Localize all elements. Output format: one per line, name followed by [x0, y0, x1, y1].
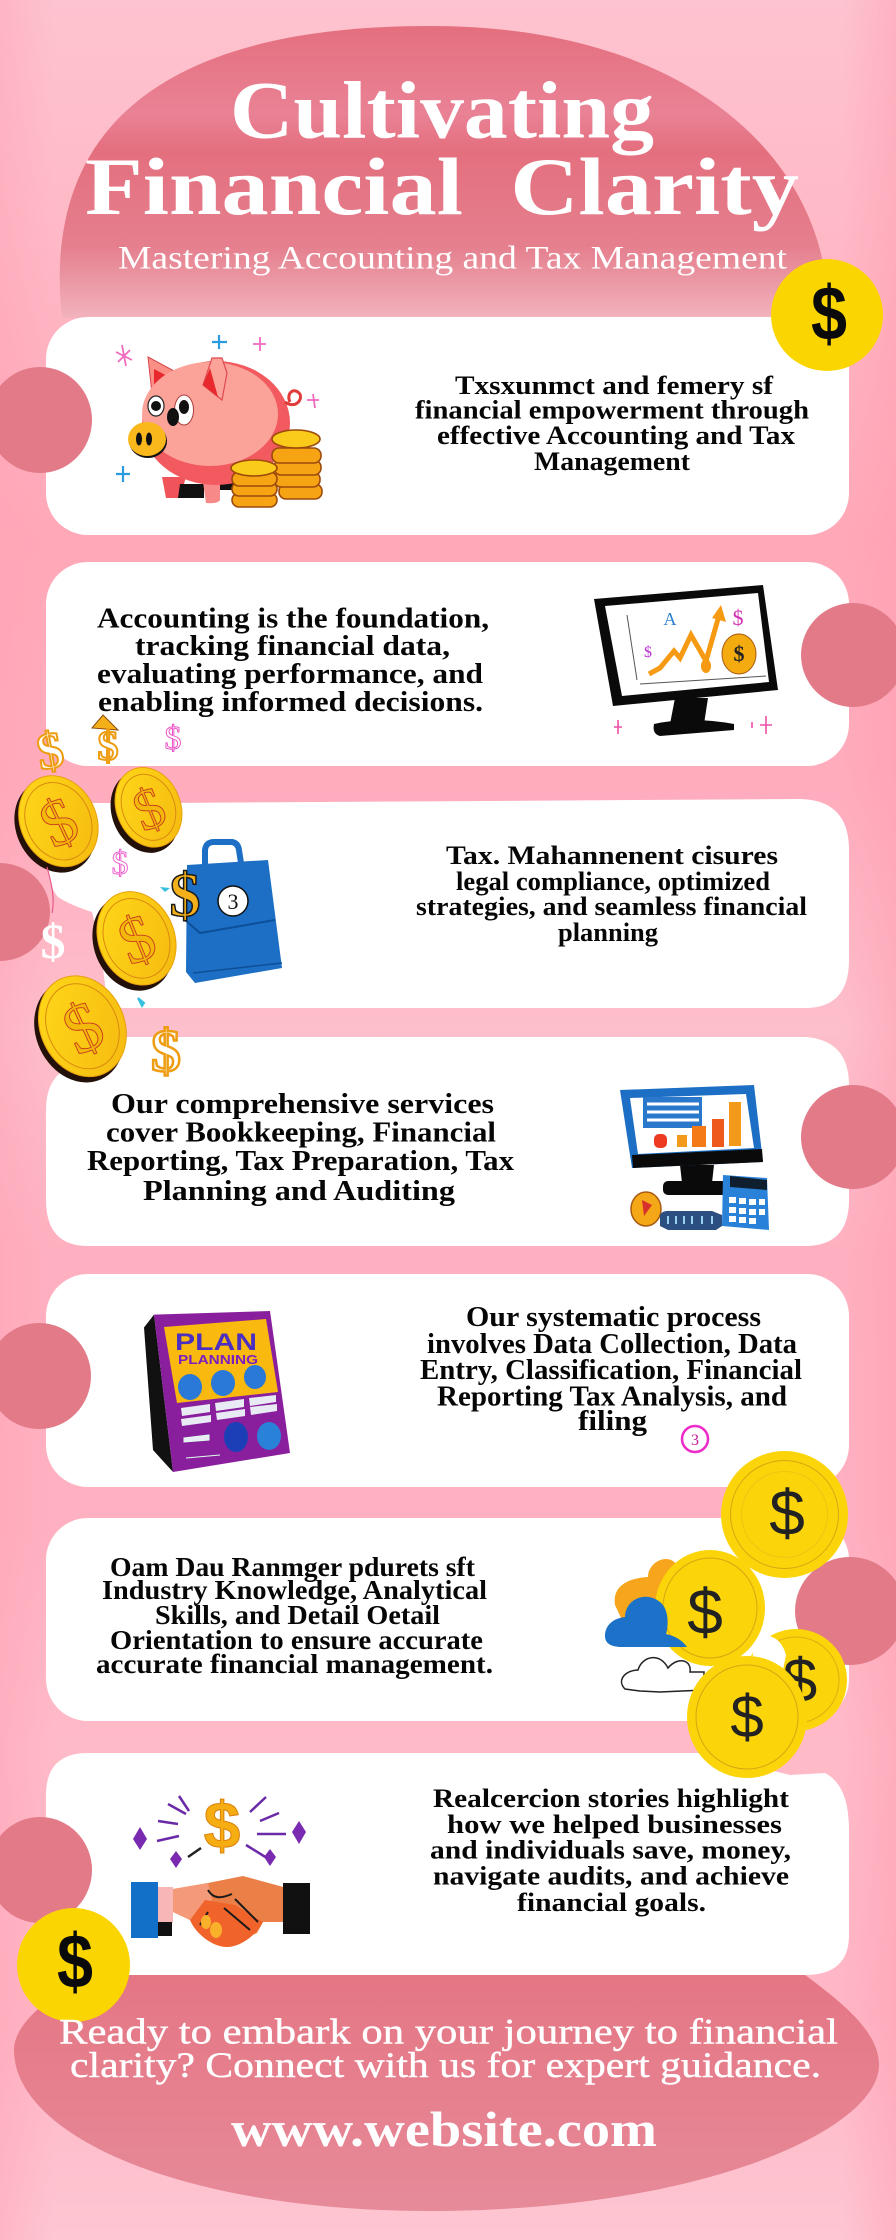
accounting text: enabling informed decisions.: [98, 686, 483, 718]
decorative circle left 3: [0, 863, 50, 961]
icon: monitor with chart: [594, 585, 778, 736]
panel: services: [46, 1037, 849, 1246]
coin: $: [123, 773, 175, 844]
services text: Our comprehensive services: [111, 1088, 494, 1120]
dollar glyphs and confetti: $: [164, 720, 182, 757]
footer blob: [14, 1975, 879, 2211]
title: [85, 64, 799, 232]
intro text: effective Accounting and Tax: [437, 421, 795, 450]
call to action text: [59, 2012, 838, 2085]
icon: monitor with chart: A: [664, 609, 676, 629]
icon: planning board: PLAN: [175, 1329, 257, 1356]
intro text: [415, 371, 810, 476]
icon: handshake with dollar: $: [204, 1788, 240, 1862]
icon: monitor with chart: $: [732, 605, 744, 630]
coin badge top right: $: [811, 271, 847, 357]
process text: Entry, Classification, Financial: [420, 1355, 802, 1386]
coin back right: $: [783, 1647, 817, 1716]
website url: www.website.com: [231, 2101, 657, 2157]
coin: [17, 961, 144, 1097]
process text: Reporting Tax Analysis, and: [437, 1382, 787, 1412]
stories text: and individuals save, money,: [430, 1834, 791, 1864]
dollar glyphs and confetti: $: [112, 845, 128, 882]
tax management text: planning: [558, 918, 658, 947]
decorative circle left 5: [0, 1323, 91, 1429]
dollar glyphs and confetti: [33, 720, 200, 1084]
expertise text: Skills, and Detail Oetail: [155, 1600, 441, 1630]
expertise text: Industry Knowledge, Analytical: [102, 1575, 488, 1605]
coin: $: [51, 986, 116, 1071]
intro text: Management: [534, 447, 690, 476]
coin front: $: [730, 1683, 764, 1750]
icon: blue briefcase: 3: [228, 889, 238, 914]
tax management text: strategies, and seamless financial: [416, 892, 807, 921]
coin top: [721, 1451, 848, 1578]
icon: planning board: [144, 1311, 290, 1472]
icon: handshake with dollar: [131, 1788, 310, 1947]
icon: clouds and gold coins: [605, 1451, 848, 1778]
accounting text: tracking financial data,: [135, 630, 450, 662]
stories text: Realcercion stories highlight: [433, 1783, 789, 1813]
process text: involves Data Collection, Data: [427, 1329, 797, 1360]
coin badge top right: [771, 259, 883, 371]
panel: introduction: [46, 317, 849, 535]
icon: monitor with chart: $: [734, 641, 744, 666]
icon: piggy bank: [116, 335, 322, 507]
coin top: $: [769, 1477, 805, 1549]
expertise text: Oam Dau Ranmger pdurets sft: [110, 1552, 475, 1582]
outline cloud: [622, 1658, 704, 1692]
call to action text: Ready to embark on your journey to financial: [59, 2012, 838, 2052]
accounting text: [97, 602, 489, 718]
intro text: Txsxunmct and femery sf: [455, 371, 773, 400]
decorative circle right 2: [801, 603, 896, 707]
stories text: financial goals.: [517, 1887, 706, 1917]
call to action text: clarity? Connect with us for expert guidance.: [70, 2045, 821, 2085]
decorative circle left 1: [0, 367, 92, 473]
services text: Planning and Auditing: [143, 1175, 456, 1207]
dollar glyphs and confetti: $: [170, 862, 200, 930]
coin middle: [655, 1550, 765, 1666]
coin: $: [108, 900, 166, 980]
icon: planning board: PLANNING: [178, 1352, 258, 1367]
icon: pink coin outline: [682, 1426, 708, 1452]
coin: [98, 757, 195, 863]
header blob: [60, 26, 828, 318]
title: Financial Clarity: [85, 141, 799, 232]
services text: Reporting, Tax Preparation, Tax: [87, 1145, 515, 1177]
decorative circle right 4: [801, 1085, 896, 1189]
decorative circle right 6: [795, 1557, 896, 1665]
coin: $: [29, 783, 89, 863]
accounting text: Accounting is the foundation,: [97, 602, 489, 634]
coin middle: $: [687, 1576, 723, 1648]
panel: success stories: [46, 1753, 849, 1975]
intro text: financial empowerment through: [415, 396, 810, 424]
panel: tax management: [46, 799, 849, 1008]
stories text: how we helped businesses: [447, 1809, 782, 1839]
expertise text: [96, 1552, 493, 1679]
icon: monitor with chart: $: [644, 644, 652, 661]
dollar glyphs and confetti: $: [151, 1018, 181, 1084]
services text: [87, 1088, 515, 1207]
tax management text: Tax. Mahannenent cisures: [446, 841, 778, 870]
icon: blue briefcase: [185, 842, 282, 983]
expertise text: Orientation to ensure accurate: [110, 1625, 483, 1655]
process text: Our systematic process: [466, 1302, 761, 1333]
dollar glyphs and confetti: $: [33, 721, 68, 782]
floating gold coins: tax panel: [0, 715, 200, 1097]
icon: computer and calculator: [620, 1085, 769, 1230]
white gap with arc: [750, 1636, 786, 1675]
panel: expertise: [46, 1518, 849, 1721]
stories text: navigate audits, and achieve: [433, 1860, 789, 1890]
expertise text: accurate financial management.: [96, 1649, 493, 1679]
decorative circle left 7: [0, 1817, 92, 1923]
title: Cultivating: [230, 64, 654, 156]
stories text: [430, 1783, 791, 1917]
coin: [0, 763, 114, 886]
orange cloud: [615, 1559, 680, 1620]
process text: [420, 1302, 802, 1437]
process text: filing: [578, 1406, 647, 1437]
coin badge bottom left: [17, 1908, 130, 2022]
coin back right: [745, 1629, 847, 1731]
coin badge bottom left: $: [57, 1919, 93, 2005]
blue cloud: [605, 1597, 687, 1647]
dollar glyphs and confetti: $: [40, 913, 66, 969]
panel: process: [46, 1274, 849, 1487]
accounting text: evaluating performance, and: [97, 658, 483, 690]
tax management text: legal compliance, optimized: [456, 867, 771, 896]
coin: [78, 880, 191, 1003]
bell marker: [92, 715, 118, 730]
icon: pink coin outline: 3: [691, 1432, 699, 1449]
dollar glyphs and confetti: $: [98, 724, 118, 770]
tax management text: [416, 841, 807, 947]
services text: cover Bookkeeping, Financial: [106, 1116, 496, 1148]
subtitle: Mastering Accounting and Tax Management: [118, 240, 787, 276]
panel: accounting: [46, 562, 849, 766]
coin front: [687, 1656, 807, 1778]
